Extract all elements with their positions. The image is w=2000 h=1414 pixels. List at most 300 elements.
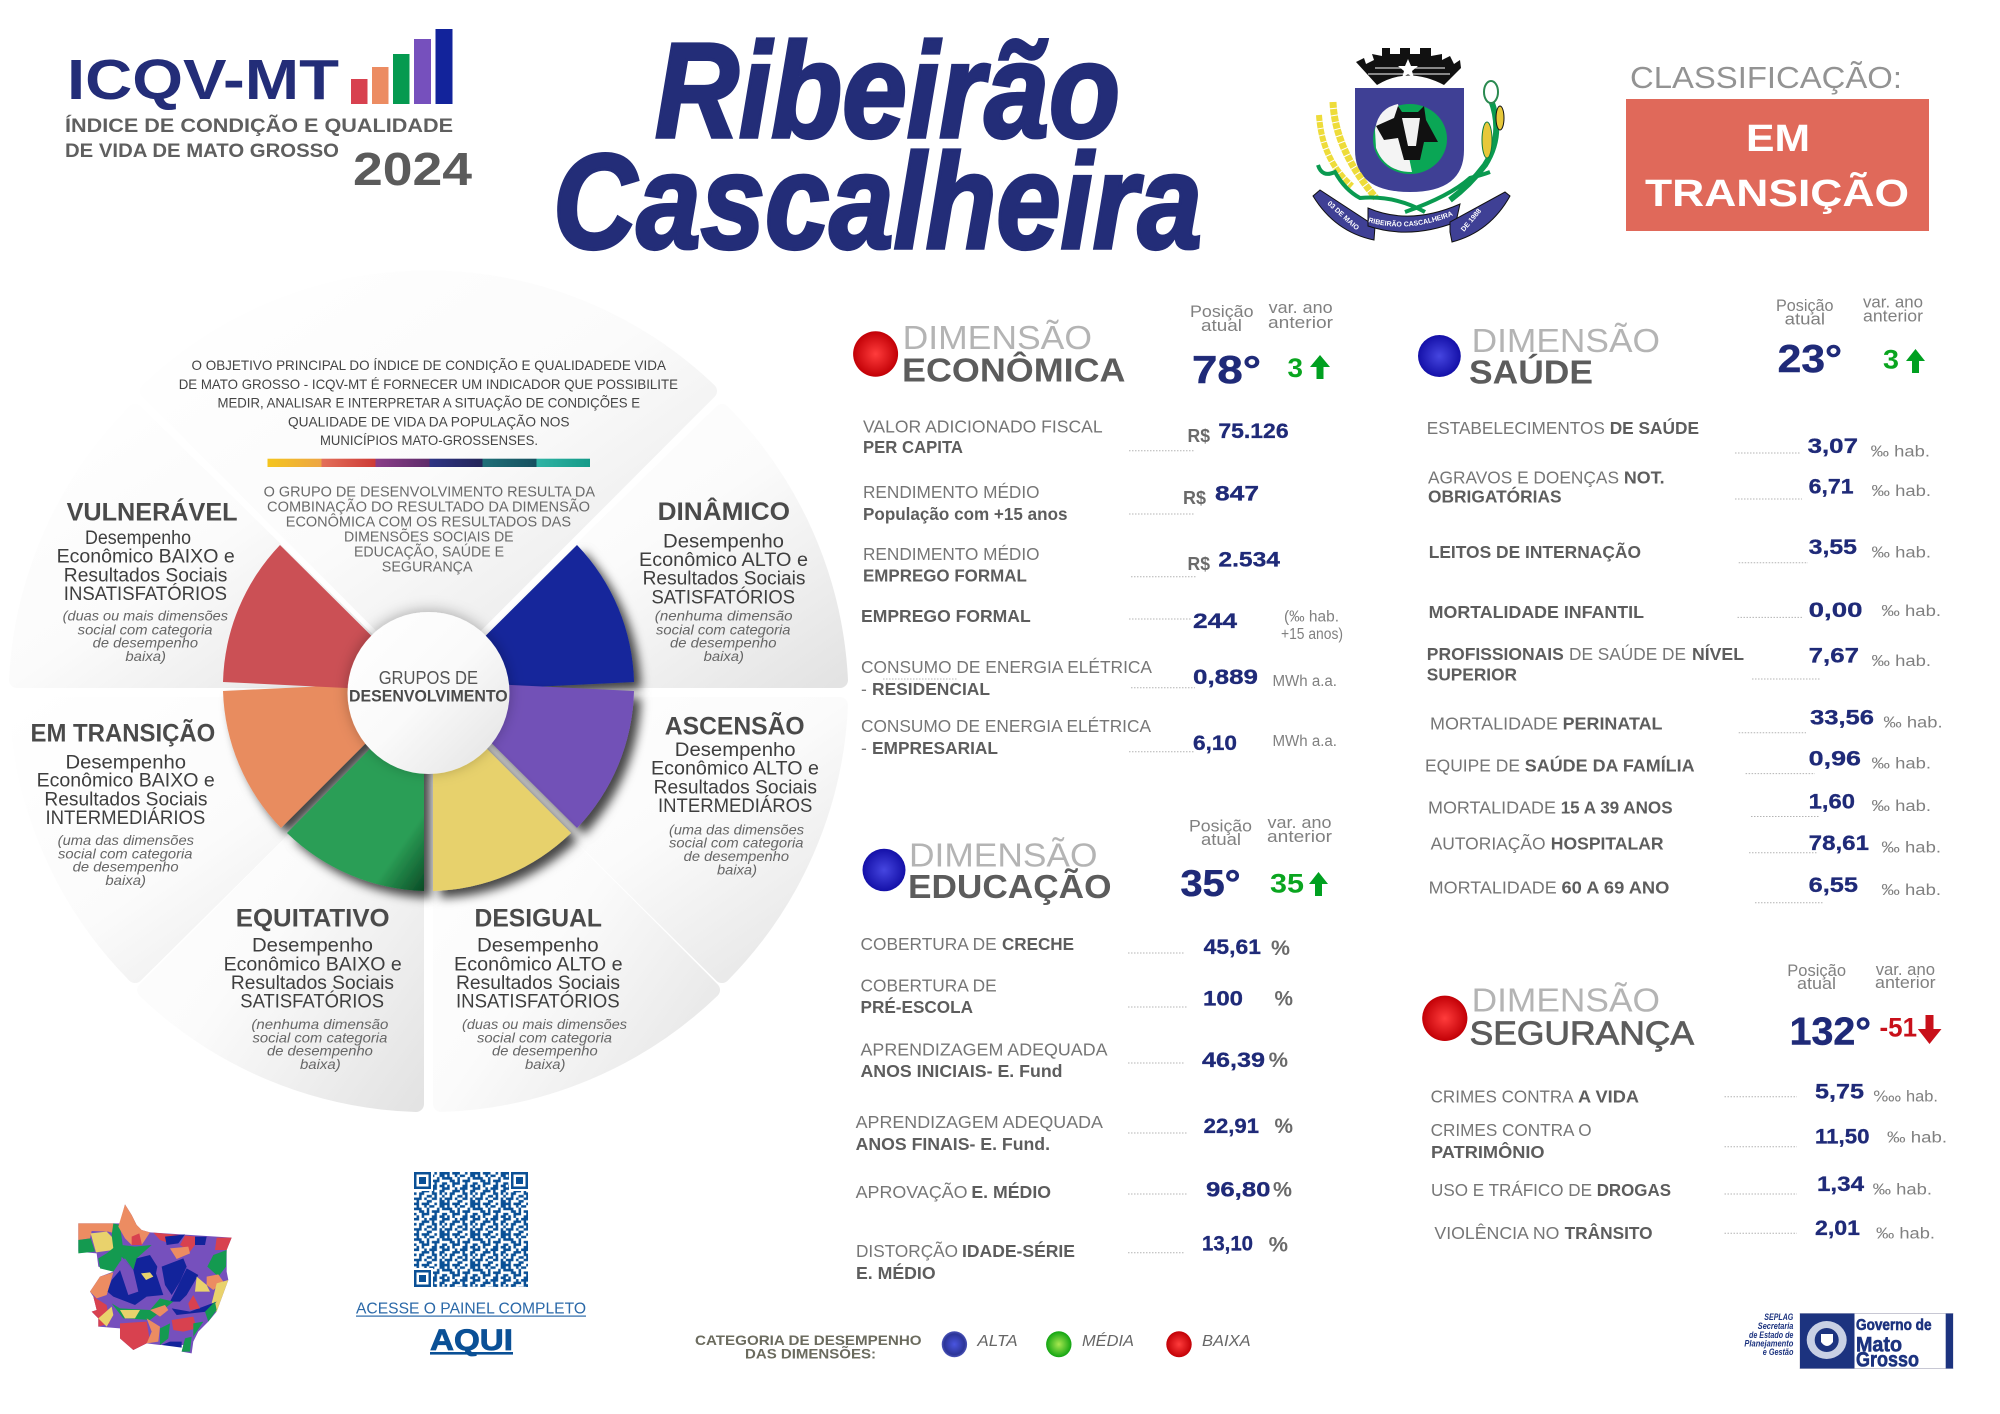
row: 60 a 69: MORTALIDADE [1429,878,1557,898]
row: mortalidade infantil [1429,599,1941,622]
row: energia residencial: RESIDENCIAL [872,679,990,699]
row: agravos: NOT. [1624,468,1665,488]
text: objective: MUNICÍPIOS MATO-GROSSENSES. [320,432,538,448]
classification badge: TRANSIÇÃO [1645,171,1909,215]
row: perinatal: MORTALIDADE [1430,713,1558,733]
row: emprego formal: EMPREGO FORMAL [861,606,1031,626]
column headers [1190,298,1333,335]
row: estabelecimentos: ‰ hab. [1871,444,1930,461]
group: Desigual: Desempenho [477,936,599,957]
column headers: Posição [1787,961,1846,980]
group: Vulnerável: VULNERÁVEL [67,498,238,527]
row: anos iniciais: ANOS INICIAIS- E. Fund [860,1061,1062,1081]
column headers: Posição [1189,817,1252,836]
column headers: anterior [1875,973,1936,992]
variation [1270,869,1328,899]
row: trânsito: VIOLÊNCIA NO [1434,1223,1559,1243]
column headers: var. ano [1876,960,1935,979]
group: Equitativo: Resultados Sociais [231,973,394,994]
group: Dinâmico: (nenhuma dimensão [655,608,793,624]
logo: ICQV-MT: 2024 [353,143,472,195]
row: pré-escola: % [1274,988,1293,1011]
row: aprovação [856,1179,1292,1202]
row: agravos [1428,468,1931,506]
variation: 35 [1270,869,1304,899]
heading: saúde: SAÚDE [1469,353,1593,390]
row: profissionais: 7,67 [1809,644,1859,668]
group: Em Transição: Desempenho [66,752,186,773]
heading: saúde [1469,322,1660,390]
logo: SEPLAG / Governo de Mato Grosso: Planejamento [1744,1339,1794,1349]
classification badge: CLASSIFICAÇÃO: [1630,60,1902,95]
row: trânsito: TRÂNSITO [1565,1222,1653,1243]
row: 60 a 69: 60 A 69 ANO [1562,878,1669,898]
row: rendimento médio emprego [863,544,1280,586]
row: drogas: ‰ hab. [1873,1181,1932,1198]
panel: dimensão educação [856,813,1332,1283]
row: distorção: DISTORÇÃO [856,1240,958,1261]
position: 78° [1192,349,1261,392]
logo: SEPLAG / Governo de Mato Grosso [1744,1312,1953,1372]
row: profissionais: NÍVEL [1692,643,1744,664]
icon: red status dot [853,331,898,377]
row: hospitalar [1431,832,1941,856]
icon: municipal coat of arms [1312,48,1511,243]
row: hospitalar: 78,61 [1809,832,1869,855]
group: Ascensão: de desempenho [684,848,789,864]
row: rendimento médio emprego: R$ [1188,554,1210,574]
row: profissionais: PROFISSIONAIS [1427,644,1564,664]
group: Dinâmico: social com categoria [656,621,791,637]
row: distorção: E. MÉDIO [856,1262,936,1283]
group: Em Transição: INTERMEDIÁRIOS [46,808,205,829]
row: profissionais: SUPERIOR [1427,665,1517,685]
group: Ascensão: baixa) [717,861,757,877]
title: municipality name [553,15,1202,277]
row: energia residencial: - [861,679,867,699]
column headers: Posição [1776,296,1834,315]
row: energia empresarial: 6,10 [1193,732,1237,755]
row: 15 a 39: 15 A 39 ANOS [1561,798,1673,818]
row: emprego formal: 244 [1193,610,1237,633]
group: Equitativo: Econômico BAIXO e [224,954,402,975]
row: perinatal: 33,56 [1810,706,1874,729]
text: group definition: EDUCAÇÃO, SAÚDE E [354,544,504,561]
colour strip [268,459,590,467]
row: leitos: LEITOS DE INTERNAÇÃO [1429,541,1641,562]
title: municipality name: Cascalheira [553,126,1202,277]
group: Em Transição: Econômico BAIXO e [37,771,215,792]
row: patrimônio [1431,1120,1947,1162]
row: drogas: DROGAS [1597,1180,1671,1200]
variation: -51 [1880,1013,1917,1043]
logo: ICQV-MT: ICQV-MT [67,48,339,112]
legend: performance categories: DAS DIMENSÕES: [745,1344,876,1361]
row: drogas: 1,34 [1817,1173,1864,1196]
row: estabelecimentos: ESTABELECIMENTOS [1427,418,1605,438]
centre circle: GRUPOS DE [379,668,478,688]
logo: SEPLAG / Governo de Mato Grosso: Secretaria [1758,1321,1793,1331]
row: leitos [1429,536,1931,563]
text: group definition: COMBINAÇÃO DO RESULTADO DA DIMENSÃO [267,499,590,516]
row: pré-escola: COBERTURA DE [860,976,997,996]
row: creche: CRECHE [1002,934,1074,954]
row: energia empresarial: - [861,738,867,758]
group: Vulnerável: de desempenho [93,635,198,651]
row: creche: COBERTURA DE [860,934,997,954]
row: 15 a 39: MORTALIDADE [1428,798,1556,818]
column headers: atual [1785,310,1825,328]
column headers: Posição [1190,302,1254,321]
heading: educação: EDUCAÇÃO [908,868,1112,905]
row: aprovação: % [1273,1179,1292,1202]
group: Equitativo: SATISFATÓRIOS [240,991,384,1013]
row: mortalidade infantil: 0,00 [1809,599,1862,622]
row: equipe saúde família: EQUIPE DE [1425,756,1520,776]
row: rendimento médio emprego: EMPREGO FORMAL [863,566,1027,586]
row: trânsito [1434,1217,1935,1243]
row: mortalidade infantil: MORTALIDADE INFANTIL [1429,602,1644,622]
row: equipe saúde família [1425,748,1931,776]
variation: 3 [1883,345,1899,375]
row: agravos: 6,71 [1809,476,1854,499]
row: patrimônio: CRIMES CONTRA O [1431,1120,1592,1140]
row: 60 a 69: ‰ hab. [1881,882,1941,899]
row: rendimento médio população: População com +15 anos [863,504,1068,524]
legend: performance categories: ALTA [976,1333,1018,1350]
column headers: atual [1797,974,1836,993]
column headers [1787,960,1936,993]
group: Em Transição: EM TRANSIÇÃO [30,718,215,748]
group: Ascensão: ASCENSÃO [665,710,805,740]
column headers [1189,813,1332,849]
column headers: var. ano [1268,813,1332,832]
group: Ascensão: social com categoria [669,835,804,851]
group: Em Transição: baixa) [105,872,146,888]
row: distorção: % [1269,1234,1288,1257]
variation [1288,353,1330,383]
row: aprovação: APROVAÇÃO [856,1181,968,1202]
group: Dinâmico: Resultados Sociais [643,569,806,590]
group: Ascensão: Desempenho [675,740,796,761]
row: energia empresarial: CONSUMO DE ENERGIA ELÉTRICA [861,716,1151,736]
row: patrimônio: PATRIMÔNIO [1431,1141,1545,1162]
link: acesse o painel completo [356,1300,586,1357]
column headers: anterior [1267,827,1332,846]
row: crimes vida: A VIDA [1578,1086,1639,1106]
row: energia residencial: 0,889 [1193,666,1258,689]
logo: ICQV-MT: ÍNDICE DE CONDIÇÃO E QUALIDADE [65,115,453,137]
column headers: anterior [1863,307,1923,326]
group: Em Transição: de desempenho [73,859,179,875]
title: municipality name: Ribeirão [655,15,1120,166]
row: anos finais: ANOS FINAIS- E. Fund. [856,1134,1050,1154]
heading: segurança: SEGURANÇA [1470,1014,1694,1051]
row: mortalidade infantil: ‰ hab. [1881,603,1941,620]
column headers [1776,293,1923,328]
column headers: var. ano [1269,298,1333,317]
text: group definition: SEGURANÇA [382,559,473,576]
row: energia empresarial: EMPRESARIAL [872,738,998,758]
row: energia residencial: MWh a.a. [1272,673,1337,690]
heading: segurança: DIMENSÃO [1472,982,1660,1019]
row: anos finais: APRENDIZAGEM ADEQUADA [856,1112,1103,1132]
panel: dimensão econômica [853,298,1343,758]
variation: 3 [1288,353,1303,383]
icon: blue status dot [1418,335,1461,377]
row: equipe saúde família: SAÚDE DA FAMÍLIA [1525,754,1695,776]
position: 35° [1180,863,1240,904]
text: objective: O OBJETIVO PRINCIPAL DO ÍNDICE DE CONDIÇÃO E QUALIDADEDE VIDA [192,357,667,373]
position: 132° [1790,1010,1871,1053]
row: 15 a 39 [1428,790,1931,818]
row: emprego formal: (‰ hab. [1284,609,1339,626]
group: Desigual: Resultados Sociais [456,973,620,994]
group: Desigual [454,905,627,1072]
logo: ICQV-MT [65,29,472,195]
group: Dinâmico: SATISFATÓRIOS [652,586,795,608]
row: hospitalar: ‰ hab. [1881,839,1941,856]
row: trânsito: ‰ hab. [1876,1225,1935,1242]
group: Dinâmico: baixa) [704,648,744,664]
group: Dinâmico [639,496,808,664]
column headers: atual [1201,316,1242,335]
heading: econômica: ECONÔMICA [902,351,1126,389]
group: Vulnerável: social com categoria [78,621,213,637]
text: objective [179,357,678,448]
row: anos finais [856,1112,1293,1154]
legend: performance categories: MÉDIA [1082,1331,1134,1350]
icon: blue status dot [862,849,906,891]
variation [1880,1013,1942,1044]
group: Desigual: DESIGUAL [474,905,602,933]
coloured wheel segments [223,545,634,891]
legend: performance categories: CATEGORIA DE DESEMPENHO [695,1332,922,1348]
group: Dinâmico: de desempenho [670,635,777,651]
group: Equitativo [224,905,402,1072]
heading: saúde: DIMENSÃO [1472,322,1660,359]
QR code [414,1172,528,1287]
row: crimes vida [1431,1080,1938,1106]
panel: dimensão segurança [1422,960,1947,1243]
column headers: var. ano [1863,293,1923,312]
row: aprovação: 96,80 [1206,1179,1270,1202]
group: Em Transição: Resultados Sociais [44,789,208,810]
group: Vulnerável: Resultados Sociais [64,565,227,586]
classification badge [1626,60,1929,231]
row: crimes vida: ‱ hab. [1873,1089,1938,1106]
group: Ascensão: Resultados Sociais [654,777,817,798]
row: energia residencial: CONSUMO DE ENERGIA ELÉTRICA [861,657,1152,677]
row: 60 a 69 [1429,874,1941,903]
row: rendimento médio população [863,482,1259,524]
row: perinatal: ‰ hab. [1883,715,1943,732]
row: leitos: ‰ hab. [1872,545,1931,562]
row: distorção [856,1233,1288,1283]
legend: performance categories: BAIXA [1202,1333,1251,1350]
row: profissionais [1427,643,1931,685]
logo: SEPLAG / Governo de Mato Grosso: de Estado de [1749,1330,1793,1340]
row: agravos: AGRAVOS E DOENÇAS [1428,468,1619,488]
row: pré-escola: 100 [1203,988,1243,1011]
row: crimes vida: CRIMES CONTRA [1431,1086,1574,1106]
row: creche: % [1271,937,1290,960]
row: valor adicionado: R$ [1188,426,1210,446]
row: drogas [1431,1173,1932,1200]
row: energia residencial [861,657,1337,699]
row: perinatal: PERINATAL [1563,713,1663,733]
icon: municipal coat of arms: DE 1988 [1460,208,1483,233]
icon: bar chart logo [351,29,452,104]
group: Vulnerável [57,498,238,664]
row: patrimônio: ‰ hab. [1887,1129,1947,1146]
group: Desigual: (duas ou mais dimensões [462,1016,627,1032]
row: pré-escola: PRÉ-ESCOLA [860,996,973,1017]
row: hospitalar: HOSPITALAR [1551,833,1664,853]
row: profissionais: DE SAÚDE DE [1569,643,1686,664]
heading: segurança [1470,982,1694,1051]
heading: econômica [902,319,1126,389]
group: Dinâmico: Desempenho [663,531,784,552]
group: Equitativo: EQUITATIVO [236,905,390,933]
panel: dimensão saúde [1418,293,1943,903]
group: Desigual: baixa) [525,1056,566,1072]
group: Ascensão: INTERMEDIÁROS [658,796,812,817]
row: 15 a 39: 1,60 [1809,790,1855,814]
position: 23° [1778,338,1842,381]
row: anos iniciais: APRENDIZAGEM ADEQUADA [860,1040,1108,1060]
row: valor adicionado [863,417,1289,457]
text: group definition: O GRUPO DE DESENVOLVIMENTO RESULTA DA [264,484,595,501]
row: distorção: 13,10 [1202,1233,1253,1256]
logo: ICQV-MT: DE VIDA DE MATO GROSSO [65,141,339,162]
group: Desigual: de desempenho [492,1043,598,1059]
group: Vulnerável: baixa) [125,648,166,664]
row: emprego formal: +15 anos) [1281,626,1343,643]
row: agravos: ‰ hab. [1872,483,1931,500]
logo: SEPLAG / Governo de Mato Grosso: e Gestão [1763,1347,1794,1357]
row: estabelecimentos: 3,07 [1808,435,1858,458]
row: rendimento médio emprego: RENDIMENTO MÉDIO [863,544,1040,564]
text: group definition: DIMENSÕES SOCIAIS DE [344,529,514,546]
row: rendimento médio população: RENDIMENTO MÉDIO [863,482,1040,502]
logo: SEPLAG / Governo de Mato Grosso: Grosso [1856,1349,1919,1372]
text: group definition [264,484,595,576]
text: objective: MEDIR, ANALISAR E INTERPRETAR A SITUAÇÃO DE CONDIÇÕES E [218,395,640,411]
centre circle [348,612,510,774]
row: estabelecimentos: DE SAÚDE [1610,417,1699,438]
row: valor adicionado: VALOR ADICIONADO FISCAL [863,417,1103,437]
row: equipe saúde família: ‰ hab. [1872,756,1931,772]
row: profissionais: ‰ hab. [1872,653,1931,670]
group: Em Transição: (uma das dimensões [58,832,194,848]
row: rendimento médio população: R$ [1183,488,1206,508]
row: valor adicionado: PER CAPITA [863,437,963,457]
group: Ascensão: (uma das dimensões [669,821,804,837]
group: Dinâmico: Econômico ALTO e [639,550,808,571]
classification badge: EM [1746,118,1810,160]
group: Desigual: social com categoria [477,1029,612,1045]
heading: educação [908,837,1112,905]
panel: development groups wheel [17,279,840,1104]
group: Vulnerável: INSATISFATÓRIOS [64,583,227,605]
row: hospitalar: AUTORIAÇÃO [1431,832,1546,853]
icon: red status dot [1422,996,1467,1041]
row: creche: 45,61 [1204,936,1261,959]
row: energia empresarial [861,716,1337,758]
row: equipe saúde família: 0,96 [1809,748,1861,771]
group: Desigual: INSATISFATÓRIOS [456,991,620,1013]
centre circle: DESENVOLVIMENTO [349,687,508,706]
row: agravos: OBRIGATÓRIAS [1428,486,1562,506]
row: estabelecimentos [1427,417,1930,461]
text: group definition: ECONÔMICA COM OS RESULTADOS DAS [286,514,571,531]
column headers: anterior [1268,313,1333,332]
row: drogas: USO E TRÁFICO DE [1431,1180,1592,1200]
row: perinatal [1430,706,1943,733]
row: anos iniciais: % [1269,1049,1288,1072]
text: objective: QUALIDADE DE VIDA DA POPULAÇÃO NOS [288,413,570,429]
row: pré-escola [860,976,1293,1017]
group: Equitativo: Desempenho [252,936,373,957]
text: objective: DE MATO GROSSO - ICQV-MT É FORNECER UM INDICADOR QUE POSSIBILITE [179,376,678,392]
row: anos finais: 22,91 [1204,1115,1259,1138]
icon: municipal coat of arms: RIBEIRÃO CASCALHEIRA [1368,212,1453,227]
row: anos iniciais: 46,39 [1202,1049,1265,1072]
row: anos finais: % [1274,1115,1293,1138]
icon: municipal coat of arms: 03 DE MAIO [1326,200,1360,232]
group: Desigual: Econômico ALTO e [454,954,623,975]
row: aprovação: E. MÉDIO [971,1181,1051,1202]
group: Ascensão [651,710,819,877]
row: leitos: 3,55 [1809,536,1857,559]
link: acesse o painel completo: AQUI [430,1324,513,1357]
group: Equitativo: de desempenho [267,1043,373,1059]
legend: performance categories [695,1331,1251,1361]
row: patrimônio: 11,50 [1815,1125,1870,1148]
group: Vulnerável: Econômico BAIXO e [57,547,235,568]
heading: educação: DIMENSÃO [909,837,1098,874]
logo: SEPLAG / Governo de Mato Grosso: SEPLAG [1764,1312,1793,1322]
heading: econômica: DIMENSÃO [903,319,1092,356]
row: creche [860,934,1290,960]
row: rendimento médio população: 847 [1215,483,1259,506]
variation [1883,345,1925,375]
row: 15 a 39: ‰ hab. [1872,798,1931,815]
row: distorção: IDADE-SÉRIE [962,1240,1075,1261]
map of Mato Grosso [78,1204,232,1353]
group: Equitativo: baixa) [300,1056,341,1072]
group: Vulnerável: Desempenho [85,528,191,549]
row: energia empresarial: MWh a.a. [1272,733,1337,750]
group: Dinâmico: DINÂMICO [658,496,790,526]
logo: SEPLAG / Governo de Mato Grosso: Governo de [1856,1317,1932,1334]
row: 60 a 69: 6,55 [1809,874,1858,897]
link: acesse o painel completo: ACESSE O PAINEL COMPLETO [356,1300,586,1317]
row: emprego formal [861,606,1343,643]
logo: SEPLAG / Governo de Mato Grosso: Mato [1856,1334,1902,1357]
group: Ascensão: Econômico ALTO e [651,759,819,780]
group: Equitativo: social com categoria [252,1029,388,1045]
row: rendimento médio emprego: 2.534 [1218,549,1280,572]
column headers: atual [1201,830,1241,849]
row: trânsito: 2,01 [1815,1217,1860,1240]
group: Em Transição: social com categoria [58,845,193,861]
row: crimes vida: 5,75 [1815,1080,1864,1103]
row: anos iniciais [860,1040,1288,1081]
group: Vulnerável: (duas ou mais dimensões [63,608,228,624]
background sectors [17,279,840,1104]
